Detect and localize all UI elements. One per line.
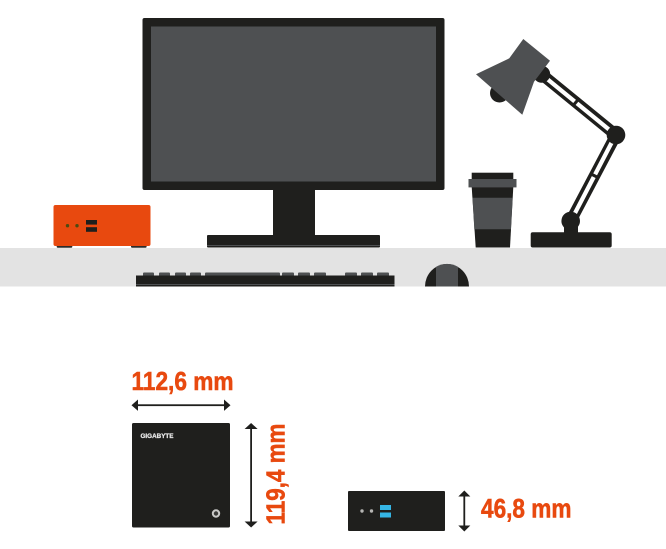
mouse <box>425 264 469 286</box>
mini PC orange <box>54 205 150 248</box>
keyboard <box>136 272 394 286</box>
power button <box>212 509 220 518</box>
mini PC top view <box>132 423 230 528</box>
desk lamp <box>476 39 625 248</box>
height label: 46,8 mm <box>481 493 572 523</box>
GIGABYTE logo: GIGABYTE <box>140 433 174 440</box>
desk surface <box>0 248 666 286</box>
height arrow <box>458 490 470 532</box>
coffee cup <box>468 173 516 248</box>
monitor <box>142 18 444 248</box>
depth arrow <box>245 423 258 528</box>
width label: 112,6 mm <box>132 366 234 396</box>
mini PC front view <box>348 491 445 531</box>
depth label: 119,4 mm <box>260 424 290 524</box>
width arrow <box>132 400 230 411</box>
